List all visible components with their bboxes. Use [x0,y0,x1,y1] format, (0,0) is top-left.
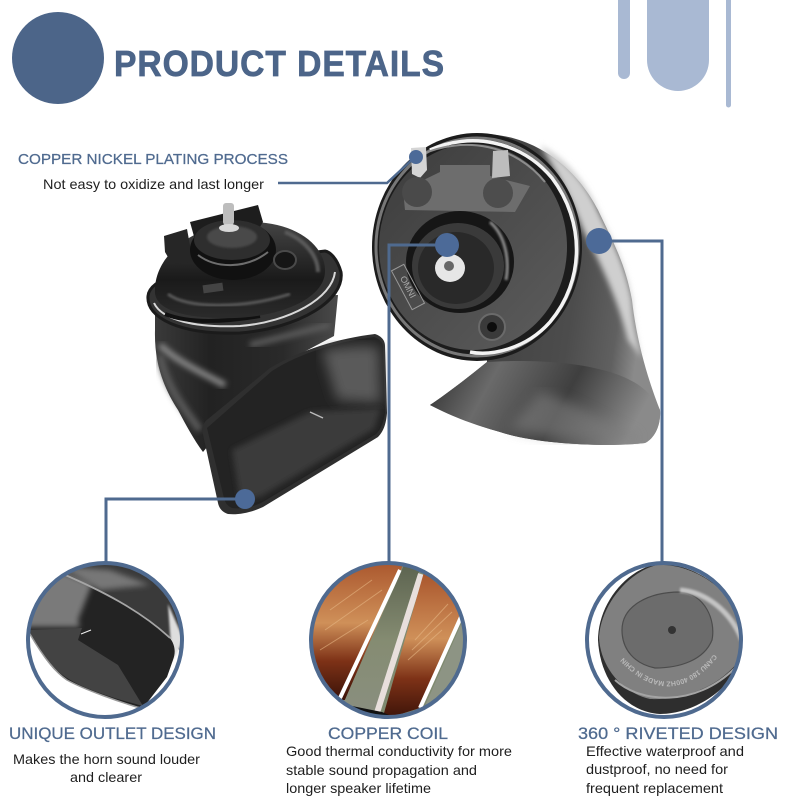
horn body [155,295,338,452]
heading: copper coil: COPPER COIL [328,724,448,743]
connector: outlet [106,489,255,563]
disc outline [598,564,745,714]
connector: copper coil [389,233,459,563]
text: outlet description: and clearer [70,769,142,785]
disc face [379,144,567,350]
flange ring [148,251,341,333]
lower wall [30,628,143,706]
disc rim [372,133,582,361]
right horn illustration [372,133,660,445]
text: riveted description [586,743,744,796]
text: outlet description: Makes the horn sound louder [13,751,200,767]
grey wall [24,572,92,627]
text: outlet description [13,751,200,785]
shell [430,134,660,445]
top right decoration bars [618,0,731,108]
horn mouth [202,334,387,514]
left horn illustration [148,203,387,514]
small nut [479,314,505,340]
heading: riveted design: 360 ° RIVETED DESIGN [578,724,778,743]
post right [483,178,513,208]
connector blocks [190,205,263,240]
small dome [190,220,276,280]
detail circle: riveted base [585,561,743,719]
detail circle: copper coil [300,560,470,722]
text: copper coil description: Good thermal conductivity for more [286,743,512,759]
heading: outlet design: UNIQUE OUTLET DESIGN [9,724,216,743]
bolt [223,203,234,225]
imprint [203,283,223,293]
title: PRODUCT DETAILS [114,43,445,84]
text: riveted description: Effective waterproof and [586,743,744,759]
text: copper coil description [286,743,512,796]
imprint label [391,264,425,310]
shell highlight [540,145,642,358]
connector: copper nickel [278,150,423,183]
outer shell band [68,565,180,650]
terminal right [492,150,510,178]
mouth interior [24,572,175,708]
text: copper coil description: stable sound propagation and [286,762,477,778]
text: riveted description: frequent replacement [586,780,723,796]
central dome [406,211,514,313]
title badge circle [12,12,104,104]
heading: copper nickel plating: COPPER NICKEL PLATING PROCESS [18,151,288,168]
disc face [599,565,745,699]
text: riveted description: dustproof, no need for [586,761,728,777]
text: copper coil description: longer speaker lifetime [286,780,431,796]
shell foot [430,361,660,445]
terminal left [411,147,427,178]
nut [274,251,296,269]
post left [402,177,432,207]
connector: riveted [586,228,662,563]
imprint label: OMNI [398,274,418,300]
bracket [403,165,530,212]
center bolt [435,254,465,282]
text: copper nickel description: Not easy to oxidize and last longer [43,176,264,192]
detail circle: riveted base: CANU 180 400HZ MADE IN CHINA [620,655,716,686]
detail circle: outlet [24,560,186,719]
upper dome [155,222,325,318]
inner recess [622,592,713,668]
embossed text [622,654,714,682]
